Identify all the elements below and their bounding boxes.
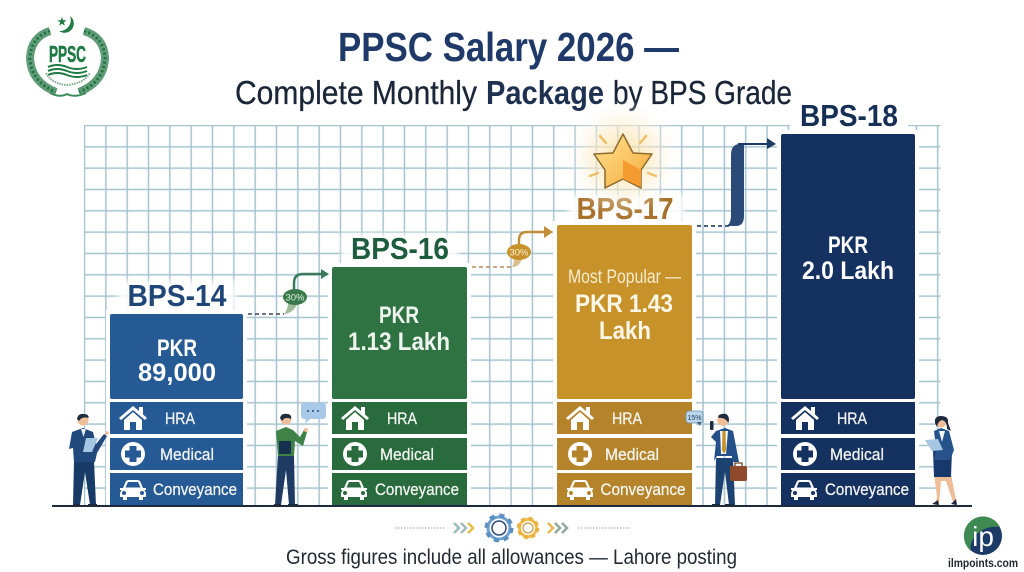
BPS-16 value currency: PKR — [379, 302, 419, 329]
BPS-14 value box — [110, 314, 243, 399]
footer icons: gears and chevrons — [395, 516, 630, 540]
15% bubble: 15% — [687, 415, 702, 422]
BPS-18 Medical row: Medical — [830, 445, 884, 464]
panel: BPS-14 — [110, 278, 243, 505]
arrow: BPS-16 to BPS-17 with 30%: 30% — [509, 248, 529, 258]
BPS-17 value amount: PKR 1.43 — [575, 290, 673, 318]
BPS-17 Conveyance row — [557, 473, 692, 505]
BPS-16 Medical row — [332, 438, 467, 470]
panel: BPS-17 — [557, 191, 692, 505]
BPS-14 Conveyance row: Conveyance — [153, 480, 237, 499]
panel: BPS-16 — [332, 231, 467, 505]
figure: woman with clipboard — [925, 416, 957, 505]
icon: blue gear — [486, 516, 512, 540]
BPS-16 heading: BPS-16 — [351, 231, 449, 266]
arrow: BPS-14 to BPS-16 with 30% — [248, 269, 329, 314]
BPS-18 value currency: PKR — [828, 232, 868, 259]
title emphasis: Package — [486, 74, 604, 111]
BPS-14 Medical row — [110, 438, 243, 470]
BPS-18 heading: BPS-18 — [800, 98, 898, 133]
ground line — [52, 505, 972, 507]
BPS-18 value box — [781, 134, 915, 399]
background grid — [84, 100, 940, 506]
BPS-14 value amount: 89,000 — [138, 359, 216, 387]
BPS-18 Medical row — [781, 438, 915, 470]
footer note: Gross figures include all allowances — Lahore posting — [286, 546, 737, 569]
figure: man with clipboard — [69, 414, 109, 506]
BPS-16 Conveyance row — [332, 473, 467, 505]
BPS-17 heading: BPS-17 — [576, 191, 674, 226]
arrow: BPS-17 to BPS-18 — [697, 138, 776, 226]
ilmpoints logo — [948, 516, 1018, 570]
BPS-16 Medical row: Medical — [380, 445, 434, 464]
BPS-16 value box — [332, 267, 467, 399]
PPSC logo — [30, 16, 105, 96]
title line 2: Complete Monthly — [235, 74, 477, 111]
BPS-16 HRA row — [332, 402, 467, 434]
PPSC logo: PPSC — [49, 41, 86, 67]
ilmpoints logo: ilmpoints.com — [948, 558, 1018, 570]
BPS-18 HRA row — [781, 402, 915, 434]
BPS-17 Medical row — [557, 438, 692, 470]
title line 2 end: by BPS Grade — [613, 74, 792, 111]
BPS-16 HRA row: HRA — [387, 409, 418, 428]
BPS-17 value unit: Lakh — [599, 317, 651, 345]
arrow: BPS-16 to BPS-17 with 30% — [472, 226, 553, 267]
BPS-17 most popular note: Most Popular — — [568, 267, 681, 288]
title line 1: PPSC Salary 2026 — — [338, 24, 679, 70]
BPS-14 heading: BPS-14 — [128, 278, 227, 313]
BPS-17 value box — [557, 225, 692, 399]
BPS-14 value currency: PKR — [157, 335, 197, 362]
ilmpoints logo: ip — [972, 521, 994, 552]
BPS-18 Conveyance row — [781, 473, 915, 505]
BPS-14 Conveyance row — [110, 473, 243, 505]
BPS-14 Medical row: Medical — [160, 445, 214, 464]
BPS-16 Conveyance row: Conveyance — [375, 480, 459, 499]
panel: BPS-18 — [781, 98, 915, 505]
icon: yellow gear — [518, 518, 538, 538]
arrow: BPS-14 to BPS-16 with 30%: 30% — [285, 292, 305, 304]
BPS-18 Conveyance row: Conveyance — [825, 480, 909, 499]
figure: man with phone and briefcase — [686, 411, 747, 506]
title — [235, 24, 792, 111]
speech bubble — [301, 403, 326, 424]
BPS-17 HRA row — [557, 402, 692, 434]
BPS-17 Conveyance row: Conveyance — [600, 480, 686, 499]
BPS-18 value amount: 2.0 Lakh — [802, 257, 894, 285]
BPS-17 Medical row: Medical — [605, 445, 659, 464]
BPS-17 HRA row: HRA — [612, 409, 643, 428]
BPS-16 value amount: 1.13 Lakh — [348, 328, 450, 356]
BPS-14 HRA row — [110, 402, 243, 434]
BPS-18 HRA row: HRA — [837, 409, 868, 428]
figure: man in green with speech bubble — [274, 403, 326, 506]
icon: star with glow — [563, 98, 683, 218]
BPS-14 HRA row: HRA — [165, 409, 196, 428]
